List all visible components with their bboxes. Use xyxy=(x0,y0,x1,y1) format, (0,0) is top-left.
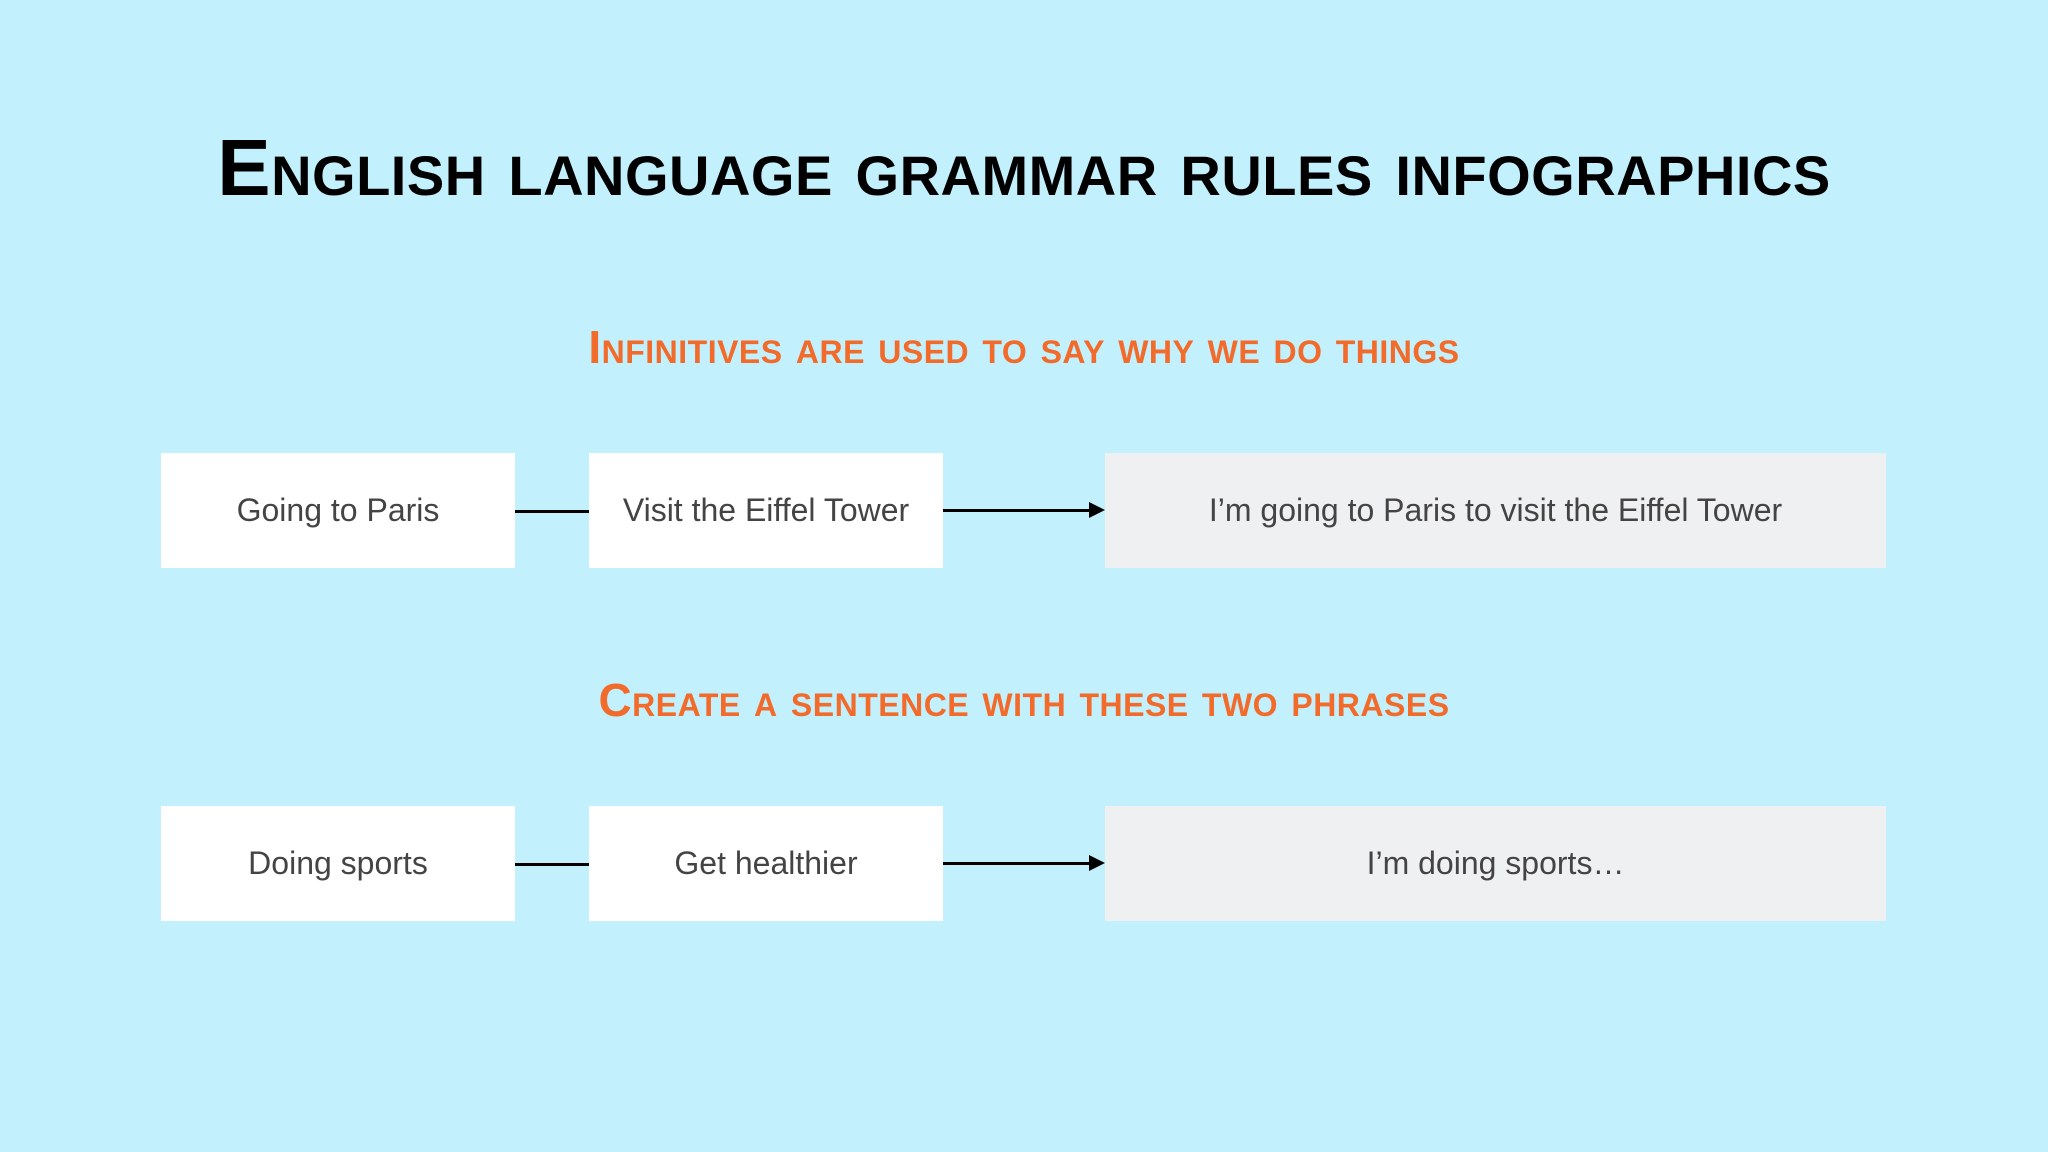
box: doing sports xyxy=(161,806,515,921)
box: visit the eiffel tower xyxy=(589,453,943,568)
connector line xyxy=(515,510,589,513)
connector line xyxy=(515,863,589,866)
arrow xyxy=(943,855,1105,871)
box: result sentence xyxy=(1105,806,1886,921)
box: result sentence: I’m doing sports… xyxy=(1367,845,1624,881)
title: English language grammar rules infographics xyxy=(217,123,1831,212)
box: get healthier xyxy=(589,806,943,921)
box: doing sports: Doing sports xyxy=(248,845,428,881)
row 1 xyxy=(161,453,1886,568)
subtitle: create sentence: Create a sentence with these two phrases xyxy=(598,674,1450,726)
row 2 xyxy=(161,806,1886,921)
box: visit the eiffel tower: Visit the Eiffel Tower xyxy=(623,492,909,528)
box: get healthier: Get healthier xyxy=(674,845,858,881)
subtitle: infinitives: Infinitives are used to say why we do things xyxy=(588,321,1460,373)
box: result sentence xyxy=(1105,453,1886,568)
box: going to paris: Going to Paris xyxy=(237,492,439,528)
arrow xyxy=(943,502,1105,518)
box: result sentence: I’m going to Paris to visit the Eiffel Tower xyxy=(1209,492,1782,528)
box: going to paris xyxy=(161,453,515,568)
